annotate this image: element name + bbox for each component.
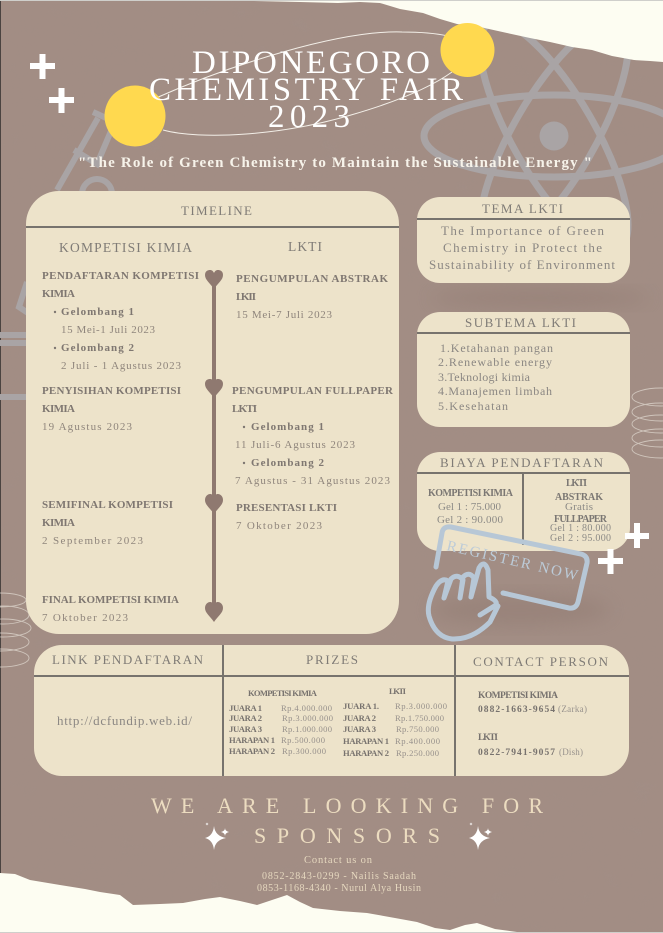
prizes lkti: JUARA 3 [343,724,376,734]
left column events: KIMIA [42,403,75,415]
tema text [429,223,615,272]
left column events [42,270,199,624]
torn paper bottom [0,873,525,933]
left column events: SEMIFINAL KOMPETISI [42,499,173,511]
prizes kompetisi kimia: Rp.300.000 [282,746,326,756]
left column events: 2 Juli - 1 Agustus 2023 [61,360,182,372]
panel: biaya pendaftaran [417,452,630,551]
icon: atom [424,3,663,269]
right column events: LKTI [232,403,257,415]
prizes kompetisi kimia: Rp.500.000 [281,735,325,745]
right column events: Gelombang 2 [251,457,324,469]
sponsor heading: WE ARE LOOKING FOR [151,793,543,818]
section: contact person: (Zarka) [558,704,587,714]
left column events: 15 Mei-1 Juli 2023 [61,324,156,336]
title: CHEMISTRY FAIR [149,72,463,108]
register text: REGISTER NOW [445,538,580,584]
heading: tema lkti: TEMA LKTI [482,201,563,216]
plus icons top left [30,54,74,113]
timeline spine with hearts [205,270,223,622]
orbit line [156,32,452,135]
left column events: Gelombang 1 [61,306,134,318]
register now button [428,527,587,639]
prizes lkti [343,686,447,758]
fee lkti: LKTI [566,478,587,489]
section: contact person [473,654,609,758]
left column events: 19 Agustus 2023 [42,421,132,433]
left column events: KIMIA [42,517,75,529]
fee lkti: FULLPAPER [554,514,608,525]
icon: sparkle left [205,822,229,850]
contact text: 0853-1168-4340 - Nurul Alya Husin [257,883,421,894]
right column events: 15 Mei-7 Juli 2023 [236,309,332,321]
heading: prizes: PRIZES [306,652,358,667]
right column events [232,273,394,532]
panel: timeline [26,191,399,634]
contact text [257,855,421,894]
left column events: 7 Oktober 2023 [42,612,128,624]
prizes lkti: HARAPAN 2 [343,748,389,758]
section: contact person: LKTI [478,733,498,743]
left column events: PENYISIHAN KOMPETISI [42,385,181,397]
section: contact person: CONTACT PERSON [473,654,609,669]
contact text: 0852-2843-0299 - Nailis Saadah [262,871,416,882]
section: link pendaftaran: http://dcfundip.web.id/ [57,713,192,728]
prizes kompetisi kimia: JUARA 1 [229,703,262,713]
prizes lkti: Rp.400.000 [395,736,440,746]
prizes kompetisi kimia: JUARA 3 [229,724,262,734]
sponsor heading [151,793,543,848]
prizes kompetisi kimia: JUARA 2 [229,713,262,723]
prizes lkti: Rp.250.000 [396,748,439,758]
prizes lkti: Rp.750.000 [396,724,439,734]
subtema list: 4.Manajemen limbah [438,384,552,398]
tema text: Sustainability of Environment [429,257,615,272]
fee kompetisi kimia [428,488,514,526]
section: contact person: KOMPETISI KIMIA [478,691,558,701]
subtema list: 3.Teknologi kimia [438,370,531,384]
left column events: FINAL KOMPETISI KIMIA [42,594,179,606]
heading: biaya pendaftaran: BIAYA PENDAFTARAN [440,455,604,470]
left column events: PENDAFTARAN KOMPETISI [42,270,199,282]
title: DIPONEGORO [192,45,430,81]
prizes lkti: HARAPAN 1 [343,736,389,746]
heading: timeline: TIMELINE [181,203,252,218]
prizes lkti: LKTI [389,686,407,696]
right column events: 7 Oktober 2023 [236,520,322,532]
prizes lkti: JUARA 1. [343,701,379,711]
fee lkti: ABSTRAK [555,492,603,503]
prizes kompetisi kimia: Rp.4.000.000 [281,703,332,713]
subtema list: 1.Ketahanan pangan [440,341,553,355]
sponsor heading: SPONSORS [254,823,440,848]
fee lkti: Gel 1 : 80.000 [550,523,611,534]
icon: microscope [0,112,115,397]
left column events: 2 September 2023 [42,535,144,547]
right column events: Gelombang 1 [251,421,324,433]
section: link pendaftaran [52,652,204,728]
yellow circle left [104,86,166,146]
icon: pointing hand [428,564,498,639]
prizes lkti: JUARA 2 [343,713,376,723]
right column events: PENGUMPULAN ABSTRAK [236,273,388,285]
right column events: LKTI [236,291,256,303]
subtema list: 5.Kesehatan [438,399,508,413]
right column events: 11 Juli-6 Agustus 2023 [235,439,356,451]
plus icons right [598,523,649,574]
prizes kompetisi kimia: HARAPAN 1 [229,735,275,745]
fee kompetisi kimia: Gel 1 : 75.000 [438,501,502,513]
heading: kompetisi kimia: KOMPETISI KIMIA [59,240,192,255]
left column events: KIMIA [42,288,75,300]
prizes kompetisi kimia: Rp.3.000.000 [282,713,333,723]
right column events: 7 Agustus - 31 Agustus 2023 [235,475,390,487]
heading: subtema lkti: SUBTEMA LKTI [465,315,576,330]
subtema list: 2.Renewable energy [438,355,552,369]
fee lkti [550,478,611,544]
section: contact person: 0882-1663-9654 [478,705,555,715]
prizes kompetisi kimia: Rp.1.000.000 [282,724,332,734]
contact text: Contact us on [304,855,373,866]
prizes lkti: Rp.3.000.000 [395,701,447,711]
right column events: PENGUMPULAN FULLPAPER [232,385,394,397]
fee kompetisi kimia: Gel 2 : 90.000 [437,514,504,526]
fee kompetisi kimia: KOMPETISI KIMIA [428,488,514,499]
heading: lkti: LKTI [288,239,322,254]
prizes kompetisi kimia [229,688,333,756]
tema text: Chemistry in Protect the [443,240,602,255]
left column events: Gelombang 2 [61,342,134,354]
section: link pendaftaran: LINK PENDAFTARAN [52,652,204,667]
coil right [632,388,663,458]
title: 2023 [268,99,350,135]
fee lkti: Gel 2 : 95.000 [550,533,611,544]
panel: tema lkti [417,197,630,283]
section: contact person: (Dish) [559,747,583,757]
prizes kompetisi kimia: HARAPAN 2 [229,746,275,756]
coil left [0,593,31,667]
torn paper top right [254,1,663,62]
right column events: PRESENTASI LKTI [236,502,337,514]
subtitle: "The Role of Green Chemistry to Maintain the Sustainable Energy " [78,155,592,171]
title [149,45,463,135]
prizes lkti: Rp.1.750.000 [395,713,444,723]
section: contact person: 0822-7941-9057 [478,748,555,758]
icon: sparkle right [469,822,492,850]
panel: bottom information [34,645,629,776]
fee lkti: Gratis [565,501,593,513]
panel: subtema lkti [417,312,630,427]
tema text: The Importance of Green [441,223,604,238]
prizes kompetisi kimia: KOMPETISI KIMIA [248,688,318,698]
subtema list [438,341,553,413]
yellow circle right [440,23,494,77]
